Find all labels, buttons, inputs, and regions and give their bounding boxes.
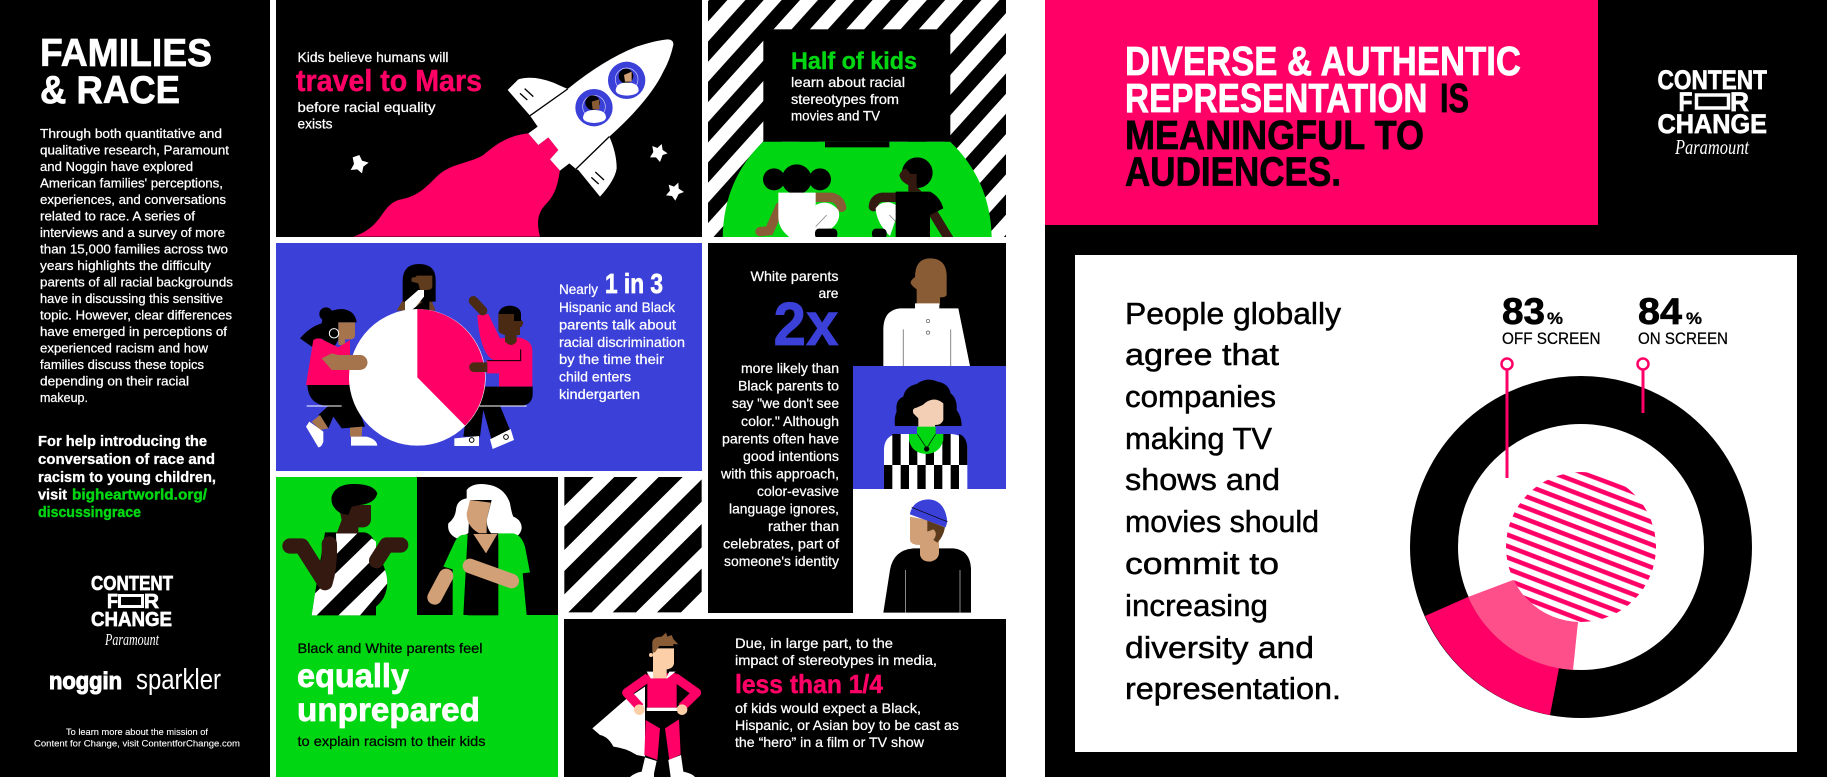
title: FAMILIES [40, 32, 212, 75]
text: less than 1/4: less than 1/4 [735, 669, 884, 699]
text: equally unprepared: Black and White parents feel [298, 640, 482, 656]
illustration: kids watching screen [723, 29, 992, 243]
text: 2x: language ignores, [729, 500, 839, 516]
text: travel to Mars: before racial equality [298, 99, 436, 115]
text: 1 in 3: racial discrimination [559, 334, 685, 350]
text: 2x: rather than [768, 518, 839, 534]
illustration: family around pie chart [300, 264, 533, 449]
call to action with link: conversation of race and [38, 452, 215, 468]
donut chart [1425, 400, 1728, 715]
text: less than 1/4: Due, in large part, to the [735, 635, 893, 651]
logo: sparkler: sparkler [136, 664, 221, 696]
text: 1 in 3: child enters [559, 368, 631, 384]
text: people globally agree: increasing [1125, 588, 1268, 623]
call to action with link: discussingrace [38, 505, 141, 521]
text: less than 1/4: the “hero” in a film or TV show [735, 734, 925, 750]
text: 1 in 3: kindergarten [559, 386, 640, 402]
logo: content for change: Paramount [1674, 135, 1750, 159]
stat: 83% off screen: 83 [1502, 291, 1545, 332]
heading banner: DIVERSE & AUTHENTIC [1125, 38, 1521, 84]
call to action with link: racism to young children, [38, 470, 216, 486]
text: 1 in 3: 1 in 3 [605, 268, 663, 299]
title: & RACE [40, 69, 180, 112]
call to action with link: For help introducing the [38, 434, 207, 450]
text: half of kids: movies and TV [791, 108, 881, 124]
intro paragraph: makeup. [40, 390, 88, 405]
text: 1 in 3: Nearly [559, 281, 598, 297]
stat: 84% on screen: ON SCREEN [1638, 329, 1728, 348]
logo: content for change: CHANGE [1658, 109, 1767, 139]
text: equally unprepared [297, 640, 486, 749]
text: 2x: say "we don't see [732, 395, 839, 411]
text: half of kids: stereotypes from [791, 91, 899, 107]
striped centre circle [1506, 460, 1665, 622]
logo: content for change: R [1730, 87, 1749, 117]
text: people globally agree: companies [1125, 379, 1276, 414]
text: equally unprepared: equally [297, 657, 410, 694]
panel: decorative stripes [564, 477, 702, 612]
text: equally unprepared: unprepared [297, 691, 480, 728]
panel: 1 in 3 parents [276, 243, 702, 471]
text: 2x: White parents [750, 268, 838, 284]
text: half of kids [791, 48, 917, 124]
text: people globally agree: agree that [1125, 337, 1279, 372]
text: less than 1/4 [735, 635, 959, 750]
text: 2x: with this approach, [720, 466, 839, 482]
text: 2x: 2x [774, 290, 839, 358]
text: 2x: parents often have [722, 430, 839, 446]
illustration: black and white parents [290, 484, 530, 615]
text: 2x: color-evasive [757, 483, 839, 499]
text: 1 in 3 [559, 268, 685, 402]
text: travel to Mars: Kids believe humans will [298, 49, 448, 65]
intro paragraph: experienced racism and how [40, 340, 209, 356]
footer note [34, 727, 240, 750]
heading banner: IS [1440, 75, 1469, 121]
logo: content for change: CONTENT [91, 572, 173, 595]
intro paragraph: years highlights the difficulty [40, 258, 212, 273]
stat: 84% on screen: % [1686, 309, 1702, 328]
text: 2x: Black parents to [738, 378, 839, 394]
logo: content for change: F [107, 590, 118, 613]
text: people globally agree: making TV [1125, 421, 1272, 456]
footer note: Content for Change, visit ContentforChange.com [34, 738, 240, 750]
stat: 83% off screen: % [1547, 309, 1563, 328]
text: equally unprepared: to explain racism to their kids [298, 733, 486, 749]
icon: rocket with flame and stars [351, 39, 684, 237]
title [40, 32, 212, 112]
text: people globally agree: diversity and [1125, 630, 1314, 665]
intro paragraph: have in discussing this sensitive [40, 291, 223, 306]
logo: content for change [1658, 65, 1767, 159]
panel: statistic card [1075, 255, 1797, 752]
text: travel to Mars: exists [298, 116, 332, 132]
text: 2x: celebrates, part of [723, 536, 839, 552]
intro paragraph: interviews and a survey of more [40, 225, 225, 240]
text: 2x: color." Although [741, 413, 839, 429]
heading banner: AUDIENCES. [1125, 148, 1341, 194]
intro paragraph: parents of all racial backgrounds [40, 274, 233, 290]
text: 2x: are [818, 285, 839, 301]
intro paragraph: American families' perceptions, [40, 176, 223, 190]
pie chart [349, 309, 486, 446]
intro paragraph: experiences, and conversations [40, 192, 226, 207]
heading banner: MEANINGFUL TO [1125, 112, 1424, 158]
call to action with link [38, 434, 216, 521]
panel: equally unprepared [276, 477, 558, 777]
logo: content for change: F [1678, 87, 1692, 117]
stat: 84% on screen [1638, 291, 1728, 348]
intro paragraph: than 15,000 families across two [40, 242, 228, 256]
logo: noggin: noggin [49, 668, 122, 695]
text: less than 1/4: impact of stereotypes in media, [735, 652, 937, 668]
text: people globally agree: commit to [1125, 546, 1279, 581]
stat: 84% on screen: 84 [1638, 291, 1682, 332]
panel: 2x white parents [708, 243, 1006, 613]
text: travel to Mars [296, 49, 482, 132]
intro paragraph [40, 126, 233, 405]
intro paragraph: topic. However, clear differences [40, 308, 232, 322]
intro paragraph: and Noggin have explored [40, 159, 193, 174]
logo: content for change: R [144, 590, 159, 613]
logo: content for change [91, 572, 173, 649]
heading banner [1045, 0, 1598, 225]
logo: content for change: Paramount [104, 630, 160, 649]
heading banner: REPRESENTATION [1125, 75, 1428, 121]
text: half of kids: Half of kids [791, 48, 917, 75]
logo: content for change: CONTENT [1658, 65, 1767, 95]
intro paragraph: depending on their racial [40, 374, 189, 388]
intro paragraph: qualitative research, Paramount [40, 142, 229, 158]
callout pin: on screen [1638, 358, 1648, 413]
text: 2x [720, 268, 839, 569]
call to action with link: visit [38, 488, 67, 504]
illustration: three parents [883, 258, 971, 613]
panel: representation poster [1045, 0, 1827, 777]
stat: 83% off screen [1502, 291, 1600, 348]
panel: less than 1/4 [564, 619, 1006, 777]
text: 1 in 3: Hispanic and Black [559, 299, 676, 315]
stat: 83% off screen: OFF SCREEN [1502, 329, 1600, 348]
intro paragraph: families discuss these topics [40, 357, 204, 372]
call to action with link: bigheartworld.org/ [72, 488, 207, 504]
text: people globally agree: shows and [1125, 462, 1280, 497]
illustration: superhero [592, 633, 697, 777]
text: people globally agree [1125, 296, 1342, 706]
text: travel to Mars: travel to Mars [296, 63, 482, 98]
callout pin: off screen [1502, 358, 1512, 478]
text: 2x: good intentions [743, 448, 839, 464]
footer note: To learn more about the mission of [66, 727, 208, 738]
text: 2x: someone's identity [724, 553, 839, 569]
text: less than 1/4: of kids would expect a Black, [735, 700, 921, 716]
logo: content for change: CHANGE [91, 608, 172, 631]
text: half of kids: learn about racial [791, 74, 905, 90]
panel: travel to Mars [276, 0, 702, 237]
intro paragraph: related to race. A series of [40, 208, 195, 224]
text: people globally agree: representation. [1125, 671, 1341, 706]
panel: half of kids [708, 0, 1006, 243]
panel: families and race intro [0, 0, 270, 777]
text: 2x: more likely than [741, 360, 839, 376]
intro paragraph: have emerged in perceptions of [40, 324, 227, 339]
text: people globally agree: movies should [1125, 504, 1319, 539]
text: 1 in 3: by the time their [559, 351, 664, 367]
text: people globally agree: People globally [1125, 296, 1342, 331]
text: 1 in 3: parents talk about [559, 316, 676, 332]
intro paragraph: Through both quantitative and [40, 126, 222, 141]
text: less than 1/4: Hispanic, or Asian boy to be cast as [735, 717, 959, 733]
